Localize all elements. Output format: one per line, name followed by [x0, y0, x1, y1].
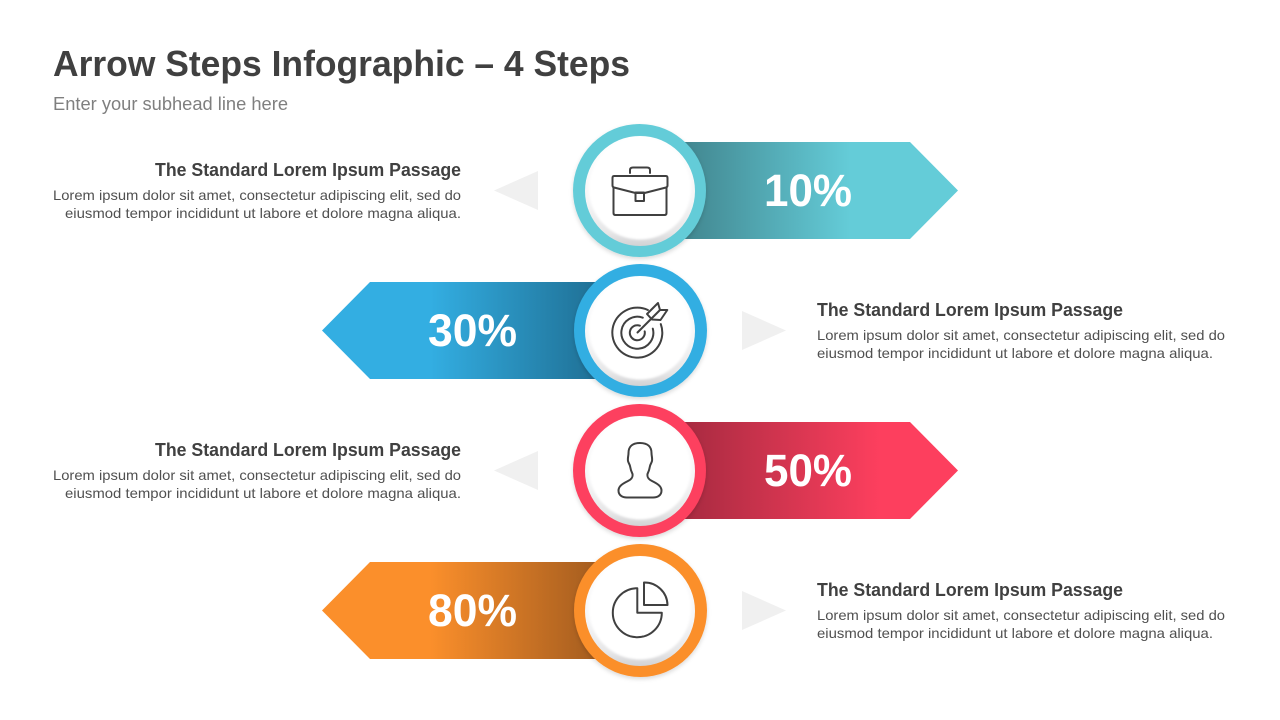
pointer triangle	[494, 171, 538, 210]
icon: briefcase	[612, 168, 668, 215]
step 2: 30%	[322, 264, 1225, 397]
badge disc	[585, 556, 695, 666]
icon: pie chart	[613, 582, 668, 637]
heading: The Standard Lorem Ipsum Passage	[817, 580, 1123, 600]
arrow banner 30%	[322, 282, 620, 379]
value 80%: 80%	[428, 585, 517, 636]
body line 1: Lorem ipsum dolor sit amet, consectetur adipiscing elit, sed do	[817, 327, 1225, 343]
heading: The Standard Lorem Ipsum Passage	[155, 440, 461, 460]
arrow banner 10%	[660, 142, 958, 239]
pointer triangle	[742, 311, 786, 350]
pointer triangle	[494, 451, 538, 490]
pointer triangle	[742, 591, 786, 630]
arrow banner 80%	[322, 562, 620, 659]
heading: The Standard Lorem Ipsum Passage	[155, 160, 461, 180]
body line 1: Lorem ipsum dolor sit amet, consectetur adipiscing elit, sed do	[53, 187, 461, 203]
badge ring	[573, 404, 706, 537]
text block	[53, 160, 461, 221]
body line 2: eiusmod tempor incididunt ut labore et dolore magna aliqua.	[817, 625, 1213, 641]
value 50%: 50%	[764, 445, 852, 496]
icon: target	[612, 303, 667, 358]
subhead: Enter your subhead line here	[53, 94, 288, 114]
text block	[817, 300, 1225, 361]
value 10%: 10%	[764, 165, 852, 216]
badge disc	[585, 276, 695, 386]
value 30%: 30%	[428, 305, 517, 356]
badge ring	[573, 124, 706, 257]
icon: person	[618, 443, 662, 498]
arrow banner 50%	[660, 422, 958, 519]
badge disc	[585, 416, 695, 526]
heading: The Standard Lorem Ipsum Passage	[817, 300, 1123, 320]
body line 2: eiusmod tempor incididunt ut labore et dolore magna aliqua.	[65, 205, 461, 221]
badge ring	[574, 544, 707, 677]
body line 1: Lorem ipsum dolor sit amet, consectetur adipiscing elit, sed do	[53, 467, 461, 483]
body line 2: eiusmod tempor incididunt ut labore et dolore magna aliqua.	[817, 345, 1213, 361]
step 4: 80%	[322, 544, 1225, 677]
title: Arrow Steps Infographic – 4 Steps	[53, 43, 630, 84]
step 3: 50%	[53, 404, 958, 537]
step 1: 10%	[53, 124, 958, 257]
text block	[817, 580, 1225, 641]
badge ring	[574, 264, 707, 397]
body line 1: Lorem ipsum dolor sit amet, consectetur adipiscing elit, sed do	[817, 607, 1225, 623]
text block	[53, 440, 461, 501]
badge disc	[585, 136, 695, 246]
body line 2: eiusmod tempor incididunt ut labore et dolore magna aliqua.	[65, 485, 461, 501]
